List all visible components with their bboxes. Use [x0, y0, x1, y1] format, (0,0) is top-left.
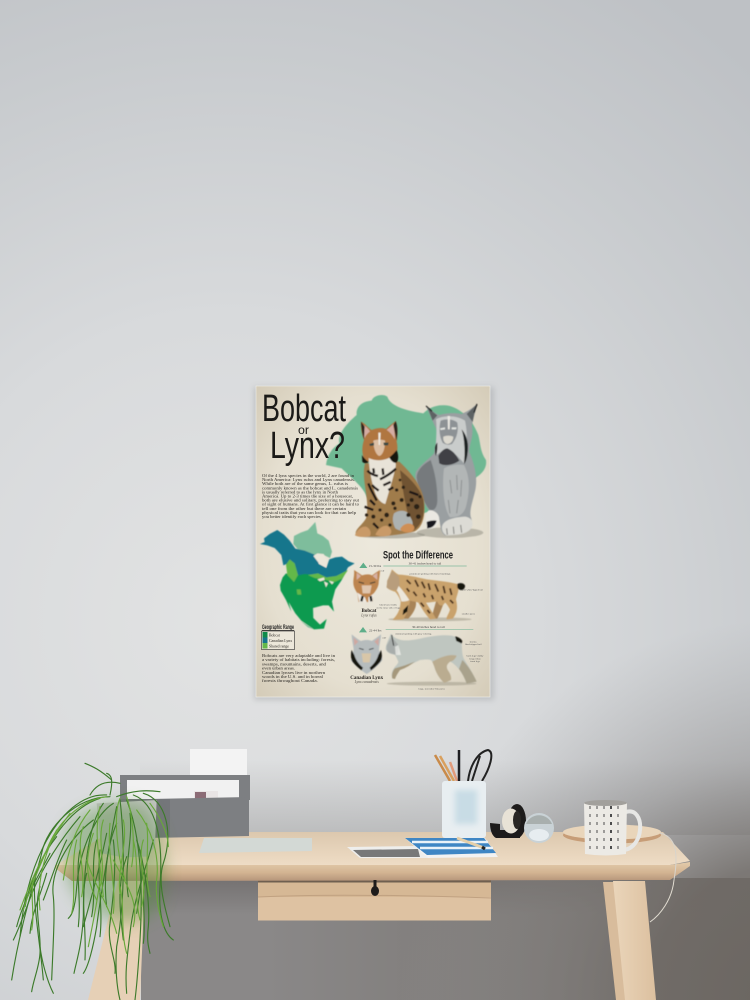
poster shadow [254, 387, 494, 700]
habitat text: Bobcats are very adaptable and live in [262, 653, 336, 658]
bobcat annotations [376, 569, 483, 616]
plant foliage mass [64, 802, 165, 923]
legend box: Canadian Lynx [269, 639, 292, 643]
blue notebook [405, 838, 498, 858]
habitat text: a variety of habitats including: forests, [262, 657, 335, 663]
lynx comparison: 22-44 lbs [369, 628, 382, 632]
holder cup [442, 781, 486, 838]
lynx annotations: back legs visibly [467, 655, 484, 658]
intro text: North America: Lynx rufus and Lynx canadensis. [262, 477, 355, 482]
illustration: walking bobcat [387, 569, 472, 621]
bobcat face [353, 570, 380, 602]
lynx face [351, 634, 382, 674]
title: Bobcat [262, 388, 346, 430]
lynx annotations: longer than [469, 657, 481, 660]
habitat text: forests throughout Canada. [262, 678, 318, 683]
bobcat name [360, 609, 377, 618]
bobcat annotations: ruff [381, 569, 385, 572]
drawer pull [371, 880, 379, 896]
bobcat comparison [353, 562, 483, 621]
intro text: of sight of humans. At first glance it can be hard to [262, 502, 359, 507]
plant [12, 763, 173, 1000]
lynx name [350, 676, 384, 684]
back legs [603, 882, 630, 1000]
bobcat comparison: 15-30 lbs [369, 564, 382, 568]
legend box: Bobcat [269, 634, 281, 638]
intro text: physical traits that you can look for that can help [262, 510, 356, 515]
desk front edge [55, 862, 690, 881]
habitat text: Canadian lynxes live in northern [262, 670, 326, 675]
lynx length line: 30-40 inches head to tail [412, 625, 445, 629]
bobcat annotations: smaller paws [462, 613, 475, 616]
bobcat annotations: on the inner side of legs [376, 606, 400, 609]
paper on desk [199, 838, 312, 853]
tape dispenser [490, 804, 526, 838]
bobcat name: Bobcat [362, 609, 377, 614]
icon: bobcat weight [359, 563, 367, 568]
intro text: While both are of the same genus, L. rufus is [262, 481, 348, 487]
pencil holder [435, 750, 491, 838]
map: Canadian lynx range [260, 530, 355, 579]
illustration: sitting bobcat [355, 421, 425, 538]
pencils and scissors [435, 750, 491, 781]
wireless charger coaster [563, 824, 676, 922]
bobcat name: Lynx rufus [360, 614, 377, 618]
front left leg [88, 880, 145, 1000]
habitat text: swamps, mountains, deserts, and [262, 661, 327, 667]
lynx name: Canadian Lynx [350, 676, 384, 681]
shadow above desk [140, 760, 750, 835]
map: shared range [286, 559, 348, 595]
lynx annotations: ruff [382, 636, 386, 639]
intro text [262, 473, 360, 519]
desk organizer [120, 749, 250, 838]
drawer [258, 880, 491, 920]
illustration: walking lynx [386, 634, 477, 686]
room corner shading [340, 560, 750, 1000]
bobcat annotations: Short white-tipped tail [460, 589, 483, 592]
glass paperweight [524, 813, 554, 843]
lynx annotations: front legs [470, 660, 480, 663]
intro text: is usually referred to as the lynx in North [262, 489, 339, 494]
heading: spot the difference: Spot the Difference [383, 550, 453, 562]
lynx annotations: minimal spotting with grey coloring [395, 632, 432, 635]
legend box: Shared range [269, 644, 289, 648]
map: bobcat range [280, 570, 347, 629]
intro text: commonly known as the bobcat and L. canadensis [262, 485, 358, 490]
intro text: you better identify each species. [262, 514, 322, 519]
intro text: America. Up to 2-3 times the size of a housecat, [262, 494, 353, 500]
mug [584, 800, 640, 856]
lynx comparison [350, 625, 484, 691]
lynx name: Lynx canadensis [354, 680, 379, 684]
shadow under desk on wall [141, 878, 750, 1000]
map: northern range light [293, 522, 332, 558]
green paint splash [326, 395, 486, 513]
intro text: both are elusive and solitary, preferring to stay out [262, 498, 360, 504]
desk top surface [56, 832, 690, 865]
title: Lynx? [270, 425, 345, 467]
map: Hudson Bay [313, 553, 327, 567]
lynx annotations: black-tipped tail [465, 643, 482, 646]
illustration: sitting lynx [415, 404, 483, 538]
habitat text: even urban areas. [262, 666, 295, 671]
bobcat annotations: black bars visible [380, 603, 398, 606]
title: or [298, 423, 309, 437]
icon: lynx weight [359, 627, 367, 632]
range map of North America [260, 522, 355, 629]
desk [55, 832, 690, 1000]
intro text: Of the 4 lynx species in the world, 2 are found in [262, 473, 355, 479]
bobcat length line: 30-41 inches head to tail [409, 562, 441, 566]
habitat text [262, 653, 336, 683]
legend box [262, 631, 294, 650]
front right leg [613, 881, 656, 1000]
bobcat annotations: prominent spotting with barred markings [410, 573, 450, 576]
lynx annotations [382, 632, 484, 691]
legend heading: Geographic Range [262, 624, 294, 631]
plant pot [97, 800, 157, 857]
lynx annotations: large, snowshoe-like paws [419, 688, 445, 691]
poster paper [256, 386, 490, 697]
intro text: tell one from the other but there are certain [262, 506, 347, 511]
title [262, 388, 346, 467]
map: great lakes [317, 577, 334, 587]
lynx annotations: shorter, [470, 640, 477, 643]
geographic range legend [262, 624, 294, 650]
habitat text: woods in the U.S. and in boreal [262, 674, 324, 679]
poster [256, 386, 490, 697]
magazine [347, 846, 428, 858]
